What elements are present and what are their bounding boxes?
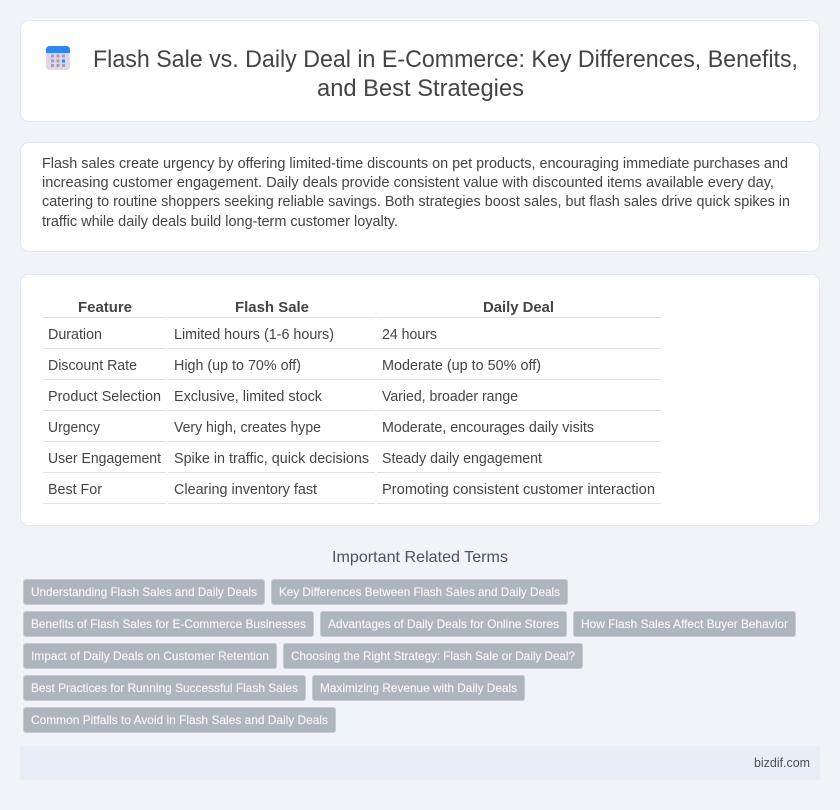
row: discount rate: Discount Rate bbox=[48, 358, 137, 374]
table header bbox=[43, 300, 661, 318]
text block: introduction: Flash sales create urgency by offering limited-time discounts on pet products, encouraging immediate purchases and bbox=[42, 156, 788, 172]
row: product selection bbox=[43, 389, 661, 411]
row: best for: Best For bbox=[48, 482, 102, 498]
tag: Best Practices for Running Successful Flash Sales bbox=[31, 681, 298, 695]
row: urgency bbox=[43, 420, 661, 442]
row: discount rate: High (up to 70% off) bbox=[174, 358, 301, 374]
row: user engagement bbox=[43, 451, 661, 473]
row: product selection: Exclusive, limited stock bbox=[174, 389, 323, 405]
text block: introduction: increasing customer engagement. Daily deals provide consistent value with discounted items available every day, bbox=[42, 175, 774, 191]
row: urgency: Urgency bbox=[48, 420, 101, 436]
table header: Feature bbox=[78, 300, 132, 316]
row: urgency: Very high, creates hype bbox=[174, 420, 321, 436]
tag: Choosing the Right Strategy: Flash Sale or Daily Deal? bbox=[291, 649, 575, 663]
title: and Best Strategies bbox=[317, 75, 524, 102]
row: best for: Clearing inventory fast bbox=[174, 482, 317, 498]
panel: title card bbox=[20, 20, 820, 122]
row: user engagement: User Engagement bbox=[48, 451, 161, 467]
row: user engagement: Spike in traffic, quick decisions bbox=[174, 451, 369, 467]
row: best for bbox=[43, 482, 661, 504]
footer: bizdif.com bbox=[754, 756, 810, 770]
tag: Key Differences Between Flash Sales and Daily Deals bbox=[279, 585, 560, 599]
tag bbox=[24, 676, 306, 700]
text block: introduction bbox=[42, 156, 790, 230]
row: discount rate: Moderate (up to 50% off) bbox=[382, 358, 541, 374]
panel: comparison table bbox=[20, 274, 820, 526]
tag bbox=[24, 580, 264, 604]
tag bbox=[284, 644, 582, 668]
row: duration: 24 hours bbox=[382, 327, 437, 343]
tag bbox=[272, 580, 568, 604]
tag bbox=[312, 676, 524, 700]
table header: Flash Sale bbox=[235, 300, 309, 316]
title bbox=[93, 46, 798, 102]
panel: introduction text bbox=[20, 142, 820, 252]
tag bbox=[574, 612, 796, 636]
tag: Advantages of Daily Deals for Online Stores bbox=[328, 617, 559, 631]
tag bbox=[320, 612, 566, 636]
tag: Benefits of Flash Sales for E-Commerce Businesses bbox=[31, 617, 306, 631]
tag bbox=[24, 644, 276, 668]
title: Flash Sale vs. Daily Deal in E-Commerce: Key Differences, Benefits, bbox=[93, 46, 798, 73]
row: urgency: Moderate, encourages daily visits bbox=[382, 420, 594, 436]
row: product selection: Product Selection bbox=[48, 389, 161, 405]
text block: introduction: traffic while daily deals build long-term customer loyalty. bbox=[42, 214, 398, 230]
row: duration: Duration bbox=[48, 327, 102, 343]
table header: Daily Deal bbox=[483, 300, 554, 316]
tag bbox=[24, 708, 336, 732]
footer bbox=[20, 746, 820, 780]
row: discount rate bbox=[43, 358, 661, 380]
tag: Common Pitfalls to Avoid in Flash Sales and Daily Deals bbox=[31, 713, 328, 727]
text block: introduction: catering to routine shoppers seeking reliable savings. Both strategies boost sales, but flash sales drive quick spikes in bbox=[42, 194, 790, 210]
tag: Maximizing Revenue with Daily Deals bbox=[320, 681, 517, 695]
row: duration: Limited hours (1-6 hours) bbox=[174, 327, 334, 343]
icon: calendar bbox=[46, 46, 70, 70]
panel: related term tags bbox=[24, 580, 796, 732]
tag: Understanding Flash Sales and Daily Deals bbox=[31, 585, 257, 599]
row: duration bbox=[43, 327, 661, 349]
tag bbox=[24, 612, 314, 636]
row: best for: Promoting consistent customer interaction bbox=[382, 482, 655, 498]
row: user engagement: Steady daily engagement bbox=[382, 451, 542, 467]
tag: Impact of Daily Deals on Customer Retention bbox=[31, 649, 269, 663]
row: product selection: Varied, broader range bbox=[382, 389, 518, 405]
heading: related terms: Important Related Terms bbox=[332, 549, 508, 566]
tag: How Flash Sales Affect Buyer Behavior bbox=[581, 617, 788, 631]
